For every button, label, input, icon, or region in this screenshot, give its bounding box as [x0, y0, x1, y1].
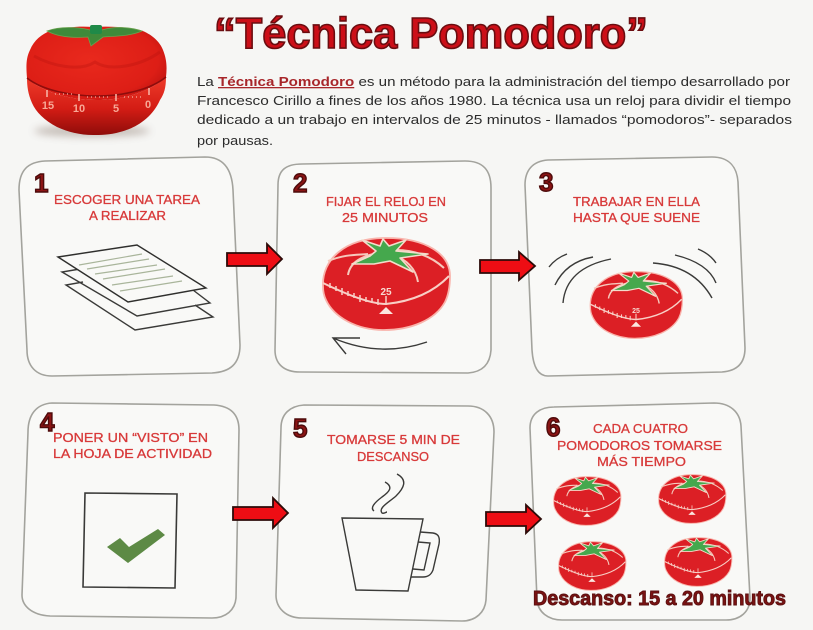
- panel: step 6 longer break every four pomodoros: POMODOROS TOMARSE: [557, 438, 722, 453]
- panel: step 1 choose a task: 1: [34, 168, 48, 198]
- panel: step 6 longer break every four pomodoros: CADA CUATRO: [593, 421, 688, 436]
- panel: step 4 mark the activity sheet: [22, 403, 239, 618]
- panel: step 4 mark the activity sheet: PONER UN “VISTO” EN: [53, 430, 208, 445]
- intro paragraph: Francesco Cirillo a fines de los años 1980. La técnica usa un reloj para dividir el tiempo: [197, 93, 791, 108]
- intro paragraph: La Técnica Pomodoro es un método para la administración del tiempo desarrollado por: [197, 74, 791, 89]
- panel: step 3 work until it rings: TRABAJAR EN ELLA: [573, 194, 700, 209]
- icon: large tomato timer photo: [26, 25, 167, 137]
- panel: step 2 set the timer: 25: [380, 287, 392, 298]
- intro paragraph: por pausas.: [197, 133, 273, 148]
- icon: large tomato timer photo: 0: [145, 99, 151, 111]
- panel: step 3 work until it rings: 25: [632, 308, 640, 315]
- intro paragraph: dedicado a un trabajo en intervalos de 25 minutos - llamados “pomodoros”- separados: [197, 112, 793, 127]
- panel: step 1 choose a task: A REALIZAR: [89, 208, 166, 223]
- panel: step 5 take a 5 minute break: DESCANSO: [357, 449, 429, 464]
- panel: step 3 work until it rings: HASTA QUE SUENE: [573, 210, 700, 225]
- panel: step 5 take a 5 minute break: 5: [293, 413, 307, 443]
- panel: step 6 longer break every four pomodoros: [530, 403, 750, 620]
- panel: step 3 work until it rings: 3: [539, 167, 553, 197]
- panel: step 1 choose a task: ESCOGER UNA TAREA: [54, 192, 200, 207]
- panel: step 5 take a 5 minute break: [276, 405, 494, 621]
- title: “Técnica Pomodoro”: [214, 9, 648, 58]
- panel: step 3 work until it rings: [525, 157, 745, 376]
- panel: step 6 longer break every four pomodoros: MÁS TIEMPO: [597, 454, 686, 469]
- panel: step 5 take a 5 minute break: TOMARSE 5 MIN DE: [327, 432, 460, 447]
- arrow: step 4 to 5: [233, 498, 288, 528]
- arrow: step 2 to 3: [480, 252, 535, 280]
- panel: step 2 set the timer: [275, 161, 491, 373]
- icon: large tomato timer photo: 5: [113, 103, 119, 115]
- icon: large tomato timer photo: 10: [73, 103, 85, 115]
- panel: step 1 choose a task: [19, 157, 240, 376]
- panel: step 4 mark the activity sheet: LA HOJA DE ACTIVIDAD: [53, 446, 212, 461]
- panel: step 2 set the timer: 2: [293, 168, 307, 198]
- intro paragraph: [197, 74, 793, 148]
- arrow: step 1 to 2: [227, 244, 282, 274]
- panel: step 2 set the timer: FIJAR EL RELOJ EN: [326, 194, 446, 209]
- icon: large tomato timer photo: 15: [42, 100, 54, 112]
- panel: step 6 longer break every four pomodoros: 6: [546, 412, 560, 442]
- arrow: step 5 to 6: [486, 505, 541, 533]
- callout: long break duration: Descanso: 15 a 20 minutos: [533, 588, 786, 610]
- panel: step 4 mark the activity sheet: 4: [40, 407, 55, 437]
- panel: step 2 set the timer: 25 MINUTOS: [342, 210, 428, 225]
